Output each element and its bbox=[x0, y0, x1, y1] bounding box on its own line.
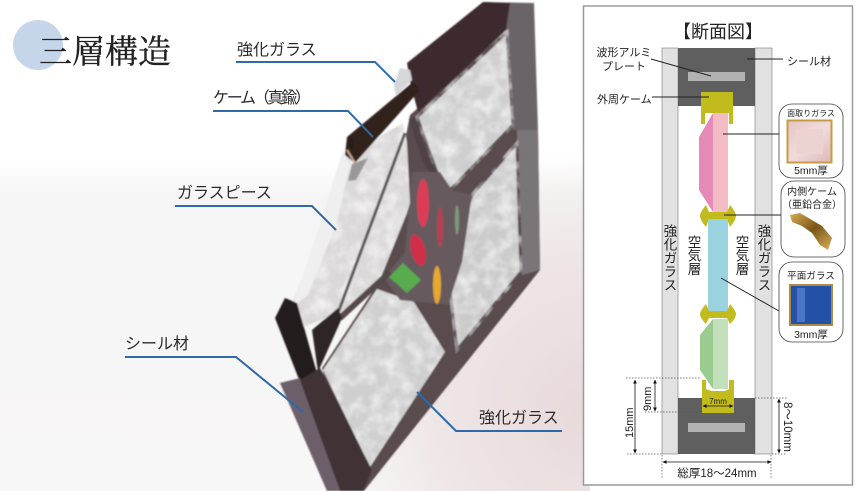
chamfered green glass bbox=[700, 319, 728, 389]
title badge circle bbox=[13, 20, 63, 70]
callout: inner came: 内側ケーム bbox=[787, 185, 837, 198]
dark came lower bbox=[275, 298, 317, 382]
dimension: 8 to 10mm bbox=[755, 398, 793, 454]
upper right band bbox=[483, 2, 538, 130]
glass corner under ridge bbox=[394, 68, 412, 96]
label: corrugated aluminium plate bbox=[597, 46, 711, 76]
left tempered glass bbox=[662, 48, 678, 454]
label: tempered glass top bbox=[236, 41, 395, 82]
jewel: green bbox=[389, 263, 421, 293]
label: tempered glass top: 強化ガラス bbox=[237, 41, 317, 59]
inner came lower bbox=[700, 304, 736, 324]
leader lines bbox=[721, 134, 781, 311]
vertical label: right tempered glass: 強化ガラス bbox=[756, 224, 771, 292]
dark came top bbox=[345, 82, 420, 163]
flat blue glass bbox=[708, 219, 728, 311]
label: glass piece bbox=[175, 184, 336, 230]
bottom pane bbox=[323, 289, 445, 467]
photo: stained glass panel bbox=[275, 2, 540, 491]
photo background bbox=[0, 0, 590, 491]
jewel: red lower bbox=[407, 233, 429, 267]
inner came upper bbox=[700, 205, 736, 227]
top aluminium plate bbox=[688, 72, 745, 81]
small lead joint bbox=[312, 308, 342, 372]
callout: inner came bbox=[781, 181, 845, 257]
label: corrugated aluminium plate: 波形アルミ bbox=[597, 46, 651, 59]
label: sealant: シール材 bbox=[125, 335, 189, 353]
callout: chamfered glass: 5mm厚 bbox=[794, 165, 828, 177]
label: sealant bbox=[747, 54, 831, 68]
vertical label: left tempered glass: 強化ガラス bbox=[662, 224, 677, 292]
callout: flat glass: 3mm厚 bbox=[794, 329, 828, 341]
label: outer came bbox=[597, 93, 709, 106]
dimension: total thickness: 総厚18～24mm bbox=[677, 466, 757, 480]
dimension: 8 to 10mm: 8～10mm bbox=[781, 402, 793, 452]
vertical label: left air layer: 空気層 bbox=[686, 235, 701, 277]
label: glass piece: ガラスピース bbox=[177, 184, 272, 202]
jewel: orange bbox=[433, 266, 441, 304]
jewel: green sliver bbox=[455, 205, 459, 235]
label: corrugated aluminium plate: プレート bbox=[602, 60, 646, 73]
jewel backing lead bbox=[384, 172, 472, 305]
shard shadows bbox=[348, 158, 368, 181]
dimension: 9mm: 9mm bbox=[642, 387, 654, 411]
dimension: 7mm bbox=[703, 397, 733, 406]
bottom sealant bbox=[678, 398, 755, 454]
vertical label: right air layer: 空気層 bbox=[734, 235, 749, 277]
panel: cross section diagram bbox=[584, 6, 852, 485]
label: tempered glass bottom: 強化ガラス bbox=[479, 409, 559, 427]
top ridge bbox=[407, 2, 510, 112]
cross section heading: 【断面図】 bbox=[673, 22, 763, 42]
dimension: total thickness bbox=[662, 455, 771, 480]
shard edge bbox=[292, 150, 350, 308]
label: outer came: 外周ケーム bbox=[597, 93, 652, 106]
bottom outer came bbox=[702, 380, 734, 413]
jewel: red right bbox=[437, 207, 443, 247]
dimension: 15mm: 15mm bbox=[624, 407, 636, 438]
panel frame bbox=[584, 6, 852, 485]
callout: flat glass bbox=[779, 262, 843, 342]
seal strip bbox=[280, 378, 340, 491]
dimension: 15mm bbox=[624, 378, 700, 454]
lead to bottom pane bbox=[340, 272, 390, 318]
diagonal came line bbox=[338, 133, 405, 313]
jewel: red top bbox=[417, 179, 429, 227]
bottom aluminium plate bbox=[688, 423, 745, 432]
right edge band bbox=[517, 130, 540, 275]
callout: chamfered glass bbox=[779, 104, 843, 178]
label: tempered glass bottom bbox=[417, 392, 562, 431]
chamfered pink glass bbox=[699, 113, 728, 212]
callout: flat glass: 平面ガラス bbox=[787, 271, 835, 282]
label: came brass bbox=[213, 89, 373, 137]
front torn glass bbox=[290, 123, 410, 327]
frame body bbox=[322, 30, 540, 491]
dimension: 7mm: 7mm bbox=[709, 397, 727, 406]
came opening bbox=[348, 137, 354, 149]
callout: inner came: （亜鉛合金） bbox=[782, 198, 842, 211]
frame edge bbox=[300, 368, 372, 491]
label: came brass: ケーム（真鍮） bbox=[213, 89, 311, 107]
upper right pane bbox=[417, 32, 513, 190]
dimension: 9mm bbox=[642, 380, 702, 412]
right pane bbox=[447, 143, 521, 350]
callout: chamfered glass: 面取りガラス bbox=[787, 108, 835, 118]
title: 三層構造 bbox=[39, 34, 171, 71]
lead between panes bbox=[412, 118, 437, 178]
right tempered glass bbox=[755, 48, 772, 454]
label: sealant bbox=[125, 335, 303, 412]
top sealant bbox=[678, 48, 755, 106]
top outer came bbox=[701, 92, 733, 124]
came copper edge bbox=[347, 150, 355, 163]
label: sealant: シール材 bbox=[787, 54, 831, 68]
